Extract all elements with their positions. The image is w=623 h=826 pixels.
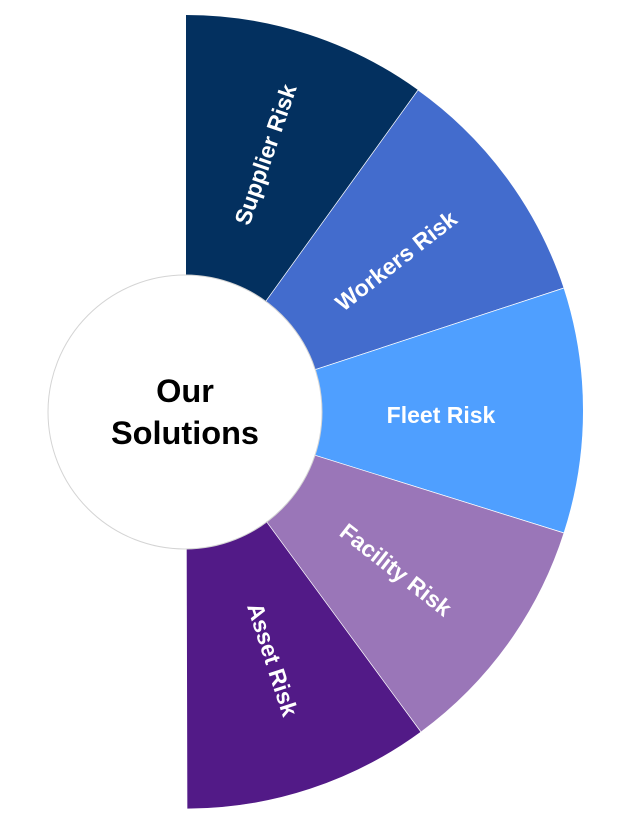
center circle: Our Solutions: Solutions [111,415,259,451]
segment: Workers Risk: Workers Risk [330,205,462,316]
segment: Asset Risk: Asset Risk [242,600,303,720]
segment: Fleet Risk: Fleet Risk [387,402,496,428]
center circle: Our Solutions [48,275,322,549]
segment: Supplier Risk [186,15,418,412]
segment: Facility Risk: Facility Risk [335,518,457,621]
segment: Facility Risk [186,415,564,732]
segment: Supplier Risk: Supplier Risk [229,80,302,228]
center circle: Our Solutions: Our [156,373,214,409]
segment: Asset Risk [186,412,421,809]
segment: Fleet Risk [186,288,583,533]
segment: Workers Risk [186,90,564,412]
